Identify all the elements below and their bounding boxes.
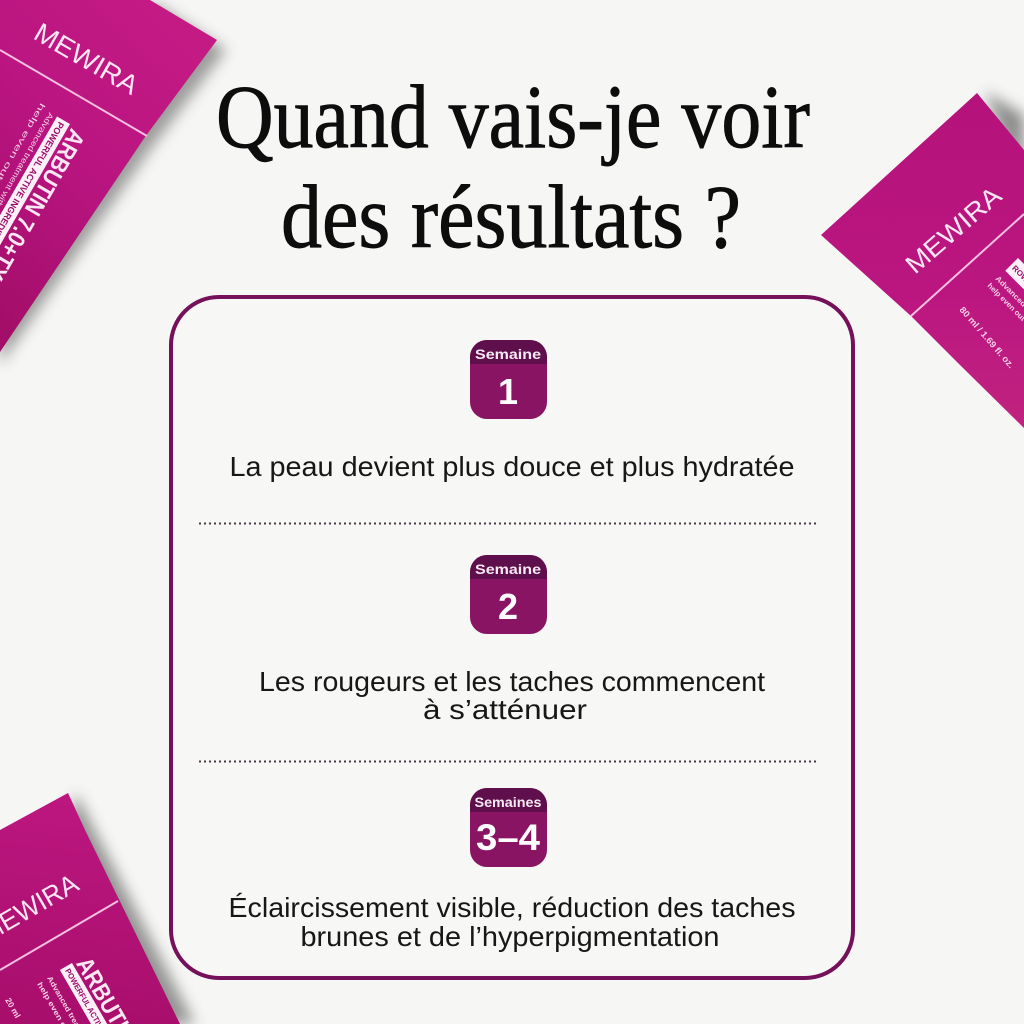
product tube: top left: [0, 0, 226, 365]
text: semaines 3-4: Éclaircissement visible, réduction des taches: [228, 892, 796, 923]
badge: semaine 1: 1: [498, 371, 518, 412]
panel: timeline: [171, 297, 853, 978]
badge: semaine 2: Semaine: [475, 561, 541, 577]
title: Quand vais-je voir: [216, 68, 810, 167]
product tube: bottom left: 20 ml: [3, 996, 23, 1020]
badge: semaines 3-4: [470, 788, 547, 867]
badge: semaine 2: 2: [498, 586, 518, 627]
product tube: top right: MEWIRA: [899, 180, 1008, 280]
text: semaine 2: Les rougeurs et les taches commencent: [259, 666, 765, 697]
text: semaine 2: [259, 666, 765, 725]
text: semaines 3-4: [228, 892, 796, 952]
product tube: top right: 80 ml / 1.69 fl. oz.: [957, 305, 1016, 370]
badge: semaine 2: [470, 555, 547, 634]
badge: semaine 1: Semaine: [475, 346, 541, 362]
text: semaine 2: à s’atténuer: [423, 694, 587, 725]
title: des résultats ?: [281, 168, 741, 267]
product tube: top right: [821, 92, 1024, 428]
badge: semaines 3-4: 3–4: [476, 817, 540, 858]
title: [216, 68, 810, 267]
badge: semaine 1: [470, 340, 547, 419]
product tube: top left: MEWIRA: [29, 17, 144, 101]
text: semaines 3-4: brunes et de l’hyperpigmentation: [300, 921, 720, 952]
product tube: bottom left: [0, 793, 195, 1024]
badge: semaines 3-4: Semaines: [474, 794, 542, 810]
text: semaine 1: La peau devient plus douce et plus hydratée: [230, 451, 794, 482]
